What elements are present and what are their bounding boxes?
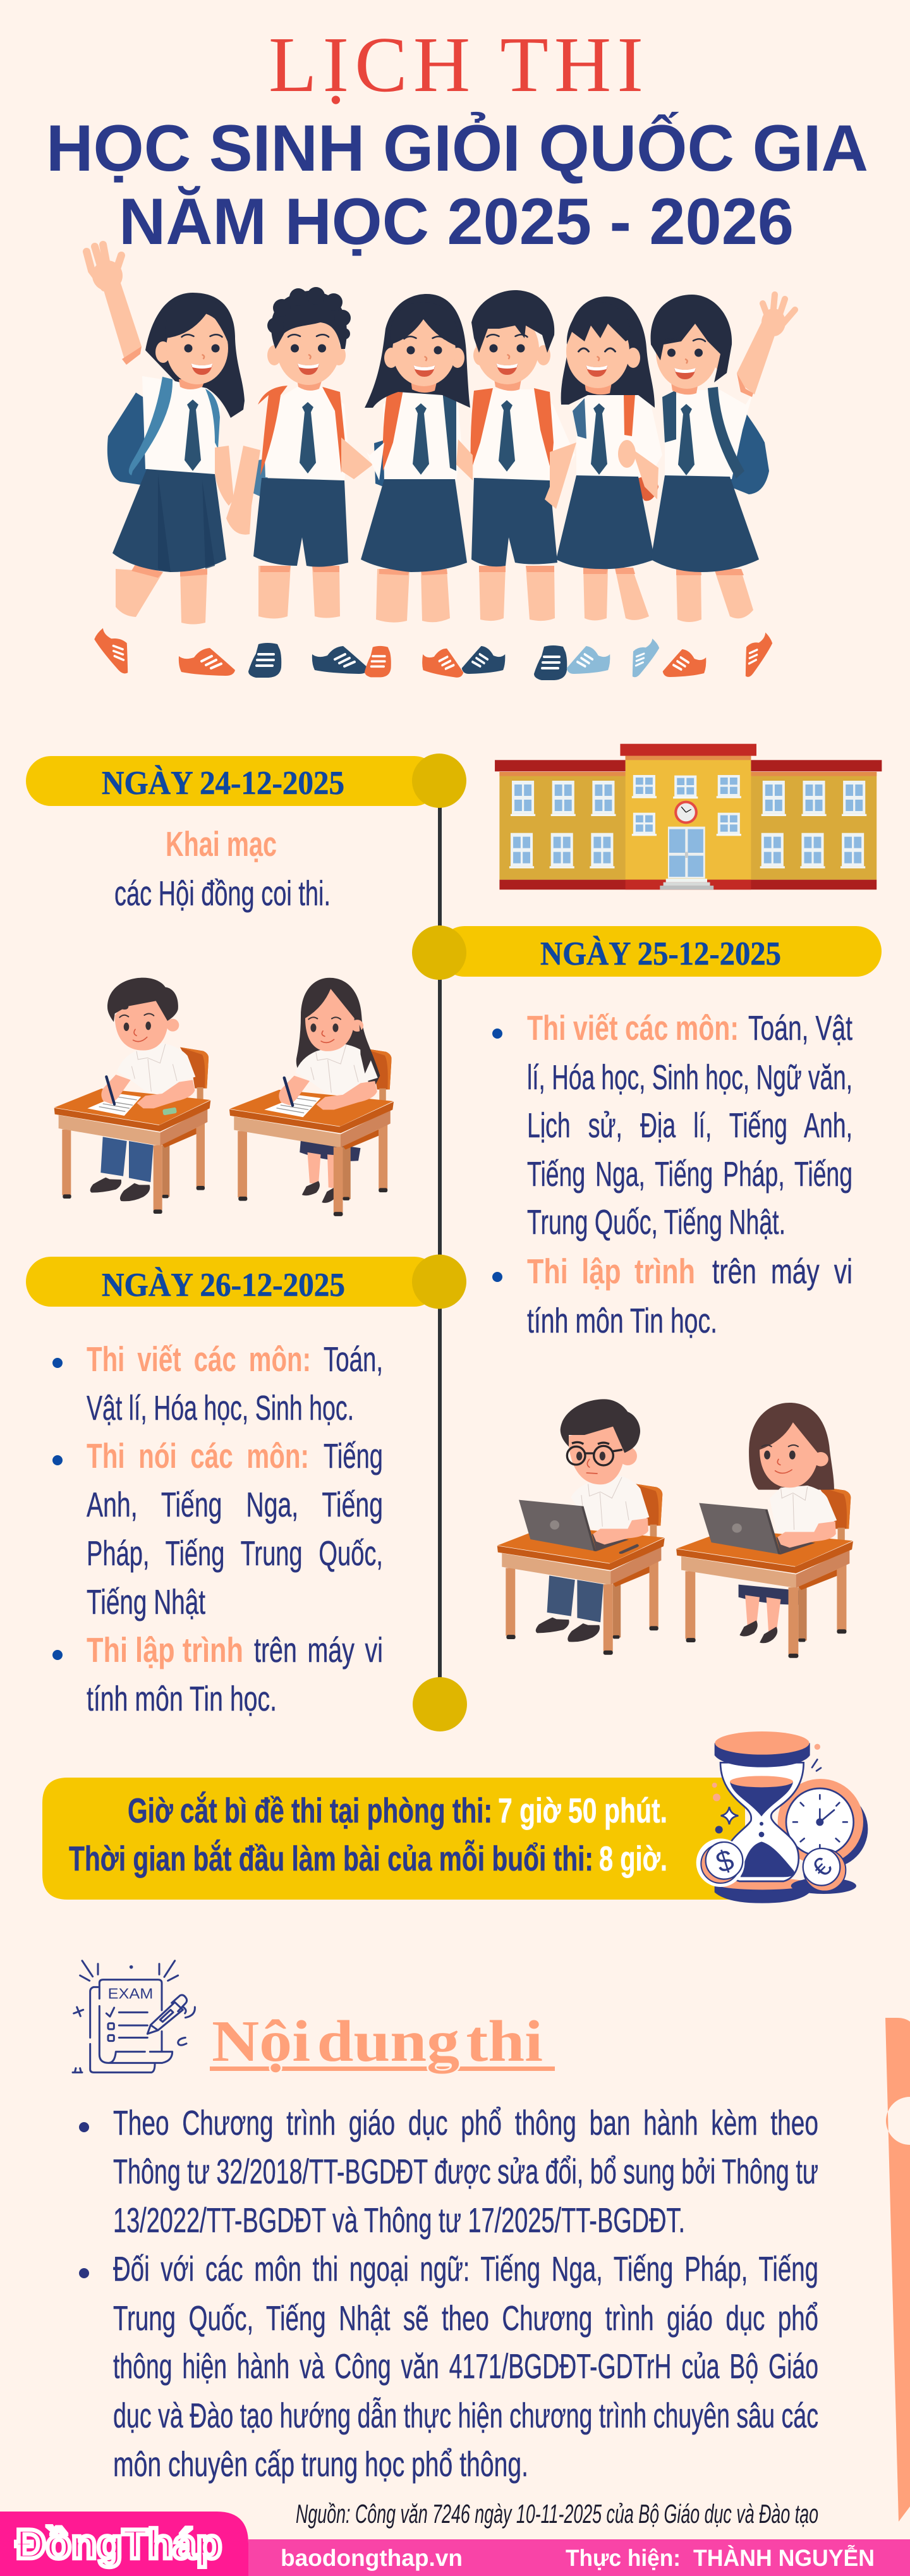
list: subjects 25-12: Thi viết các môn: [527,1008,739,1047]
title line: NĂM HỌC 2025 - 2026: NĂM HỌC 2025 - 2026 [119,185,794,259]
list: subjects 26-12: Tiếng Nhật [87,1582,205,1621]
icon: exam paper with pencil [73,1961,195,2072]
student 3: long-haired girl [361,294,470,623]
list: subjects 26-12 [52,1340,383,1718]
date header: 24-12-2025 [26,754,466,808]
date header: 24-12-2025: NGÀY 24-12-2025 [102,765,344,802]
list: subjects 25-12: Thi lập trình [527,1252,695,1291]
list: subjects 25-12: Toán, Vật [748,1008,852,1047]
list: subjects 25-12 [492,1008,852,1340]
callout: exam start times: Giờ cắt bì đề thi tại phòng thi: [128,1791,492,1830]
list: subjects 26-12: Anh, Tiếng Nga, Tiếng [87,1485,383,1524]
coin dollar sign: $ [712,1843,737,1879]
list: subjects 26-12: Thi nói các môn: [87,1436,309,1475]
date header: 25-12-2025 [412,925,882,980]
coin euro sign: € [806,1852,837,1883]
list: subjects 25-12: trên máy vi [712,1252,852,1291]
date header: 26-12-2025: NGÀY 26-12-2025 [102,1267,345,1303]
list: subjects 26-12: Vật lí, Hóa học, Sinh học. [87,1388,354,1427]
heading: Nội dung thi: Nội dung thi [212,2009,543,2074]
text block: exam content: môn chuyên cấp trung học phổ thông. [113,2445,528,2484]
student 2: curly-haired boy [226,287,373,618]
title line: HỌC SINH GIỎI QUỐC GIA: HỌC SINH GIỎI QUỐC GIA [46,111,868,185]
student 1: girl waving [87,245,245,625]
list: subjects 26-12: Pháp, Tiếng Trung Quốc, [87,1534,383,1573]
callout: exam start times: 7 giờ 50 phút. [498,1791,667,1830]
icon: hourglass with clock and coins [696,1731,868,1903]
illustration: boy with laptop [497,1399,665,1655]
date header: 25-12-2025: NGÀY 25-12-2025 [540,936,781,972]
credit name: THÀNH NGUYỄN [693,2544,875,2571]
illustration: boy writing at desk [54,978,210,1214]
text: Khai mạc: Khai mạc [166,824,277,864]
credit label: Thực hiện: [566,2545,681,2571]
student 6: waving student [651,295,795,622]
decoration: right edge peach strip [885,2018,910,2522]
callout: exam start times [42,1778,745,1900]
timeline end dot [413,1677,467,1731]
callout: exam start times: 8 giờ. [599,1839,667,1878]
student 5: smiling girl [556,296,662,621]
footer [0,2512,910,2576]
list: subjects 26-12: Thi viết các môn: [87,1340,311,1379]
list: subjects 26-12: Tiếng [324,1436,383,1475]
illustration: girl with laptop [676,1403,853,1658]
timeline vertical line [438,803,442,1682]
website: baodongthap.vn [281,2545,463,2571]
title: LỊCH THI: LỊCH THI [269,21,643,109]
list: subjects 26-12: tính môn Tin học. [87,1679,277,1718]
student 4: short-haired boy [456,290,576,621]
callout: exam start times: Thời gian bắt đầu làm bài của mỗi buổi thi: [69,1839,593,1878]
icon: school building [495,744,882,889]
list: subjects 26-12: Toán, [324,1340,383,1379]
logo: Đồng Tháp: ĐồngTháp [16,2520,222,2567]
exam label: EXAM [108,1986,153,2002]
list: subjects 26-12: trên máy vi [254,1630,383,1670]
list: subjects 25-12: tính môn Tin học. [527,1301,717,1340]
student shoes [90,623,775,680]
date header: 26-12-2025 [26,1254,466,1309]
text block: exam content [79,2103,818,2484]
text: các Hội đồng coi thi: các Hội đồng coi thi. [114,874,331,913]
illustration: six students waving [87,245,795,680]
list: subjects 26-12: Thi lập trình [87,1630,243,1670]
illustration: girl writing at desk [229,978,394,1216]
list: subjects 25-12: Trung Quốc, Tiếng Nhật. [527,1202,786,1242]
